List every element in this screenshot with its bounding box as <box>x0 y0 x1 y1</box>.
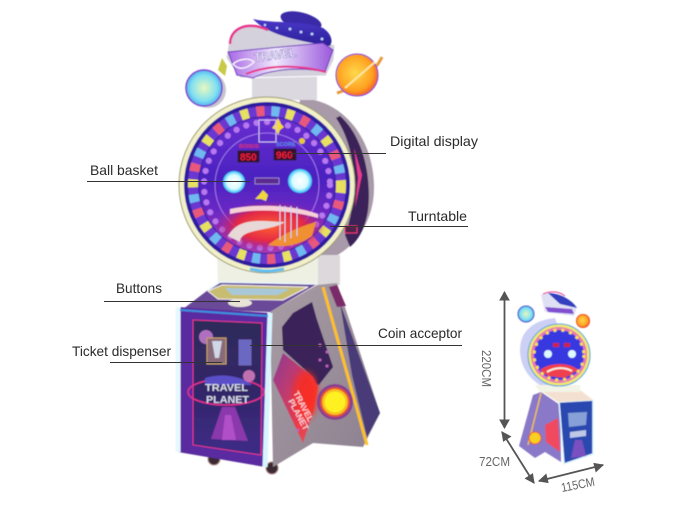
small right planet <box>576 314 590 328</box>
purple bulbs ring <box>204 122 330 248</box>
ticket dispenser <box>199 330 226 364</box>
digital display <box>238 142 296 164</box>
width label: 115CM <box>560 475 596 495</box>
left planet <box>186 70 226 108</box>
cabinet front panel <box>178 307 270 467</box>
label: Turntable: Turntable <box>408 208 467 224</box>
small side panel <box>519 392 561 462</box>
height arrow <box>500 292 509 428</box>
label: Ticket dispenser: Ticket dispenser <box>72 343 171 359</box>
label: Buttons: Buttons <box>116 280 162 296</box>
UFO graphic on front <box>188 370 264 405</box>
digital display: 850 <box>240 152 257 164</box>
side yellow button <box>317 384 353 420</box>
lower red landscape <box>214 201 326 251</box>
top neck support <box>252 76 317 100</box>
beam graphic <box>211 407 248 441</box>
small wheel <box>528 324 590 386</box>
small top sign <box>541 292 577 316</box>
small deck <box>543 390 593 402</box>
front logo <box>205 382 250 406</box>
cabinet side panel: PLANET <box>286 397 311 433</box>
machine back body <box>290 98 374 262</box>
leader lines <box>87 154 468 362</box>
label: Ball basket: Ball basket <box>90 162 158 178</box>
sign title: TRAVEL <box>253 45 297 65</box>
depth label: 72CM <box>479 455 510 469</box>
digital display: BONUS <box>239 144 259 150</box>
control deck <box>183 282 317 312</box>
casters <box>208 453 278 474</box>
label: Digital display: Digital display <box>390 133 478 149</box>
coin acceptor <box>238 339 252 366</box>
small machine body <box>520 318 575 385</box>
side panel logo: TRAVEL <box>291 389 316 423</box>
small left planet <box>518 306 534 322</box>
pedestal <box>217 255 340 285</box>
small machine dimension view <box>518 292 593 464</box>
digital display: 960 <box>276 150 293 162</box>
front logo: TRAVEL <box>205 382 249 394</box>
small cabinet front <box>559 400 593 464</box>
cabinet side panel <box>270 283 380 467</box>
width arrow <box>539 464 603 482</box>
right planet <box>336 54 382 96</box>
number tiles ring <box>193 111 341 259</box>
turntable wheel <box>179 97 355 273</box>
label: Coin acceptor: Coin acceptor <box>378 325 462 341</box>
small side button glow <box>528 393 560 452</box>
main arcade machine <box>178 8 382 474</box>
star <box>255 190 268 201</box>
digital display: SCORE <box>276 142 296 148</box>
top sign: UFO and banner <box>218 8 335 78</box>
depth arrow <box>502 432 534 483</box>
height label: 220CM <box>479 350 493 387</box>
front logo: PLANET <box>206 394 250 406</box>
ball basket holes <box>223 171 245 193</box>
